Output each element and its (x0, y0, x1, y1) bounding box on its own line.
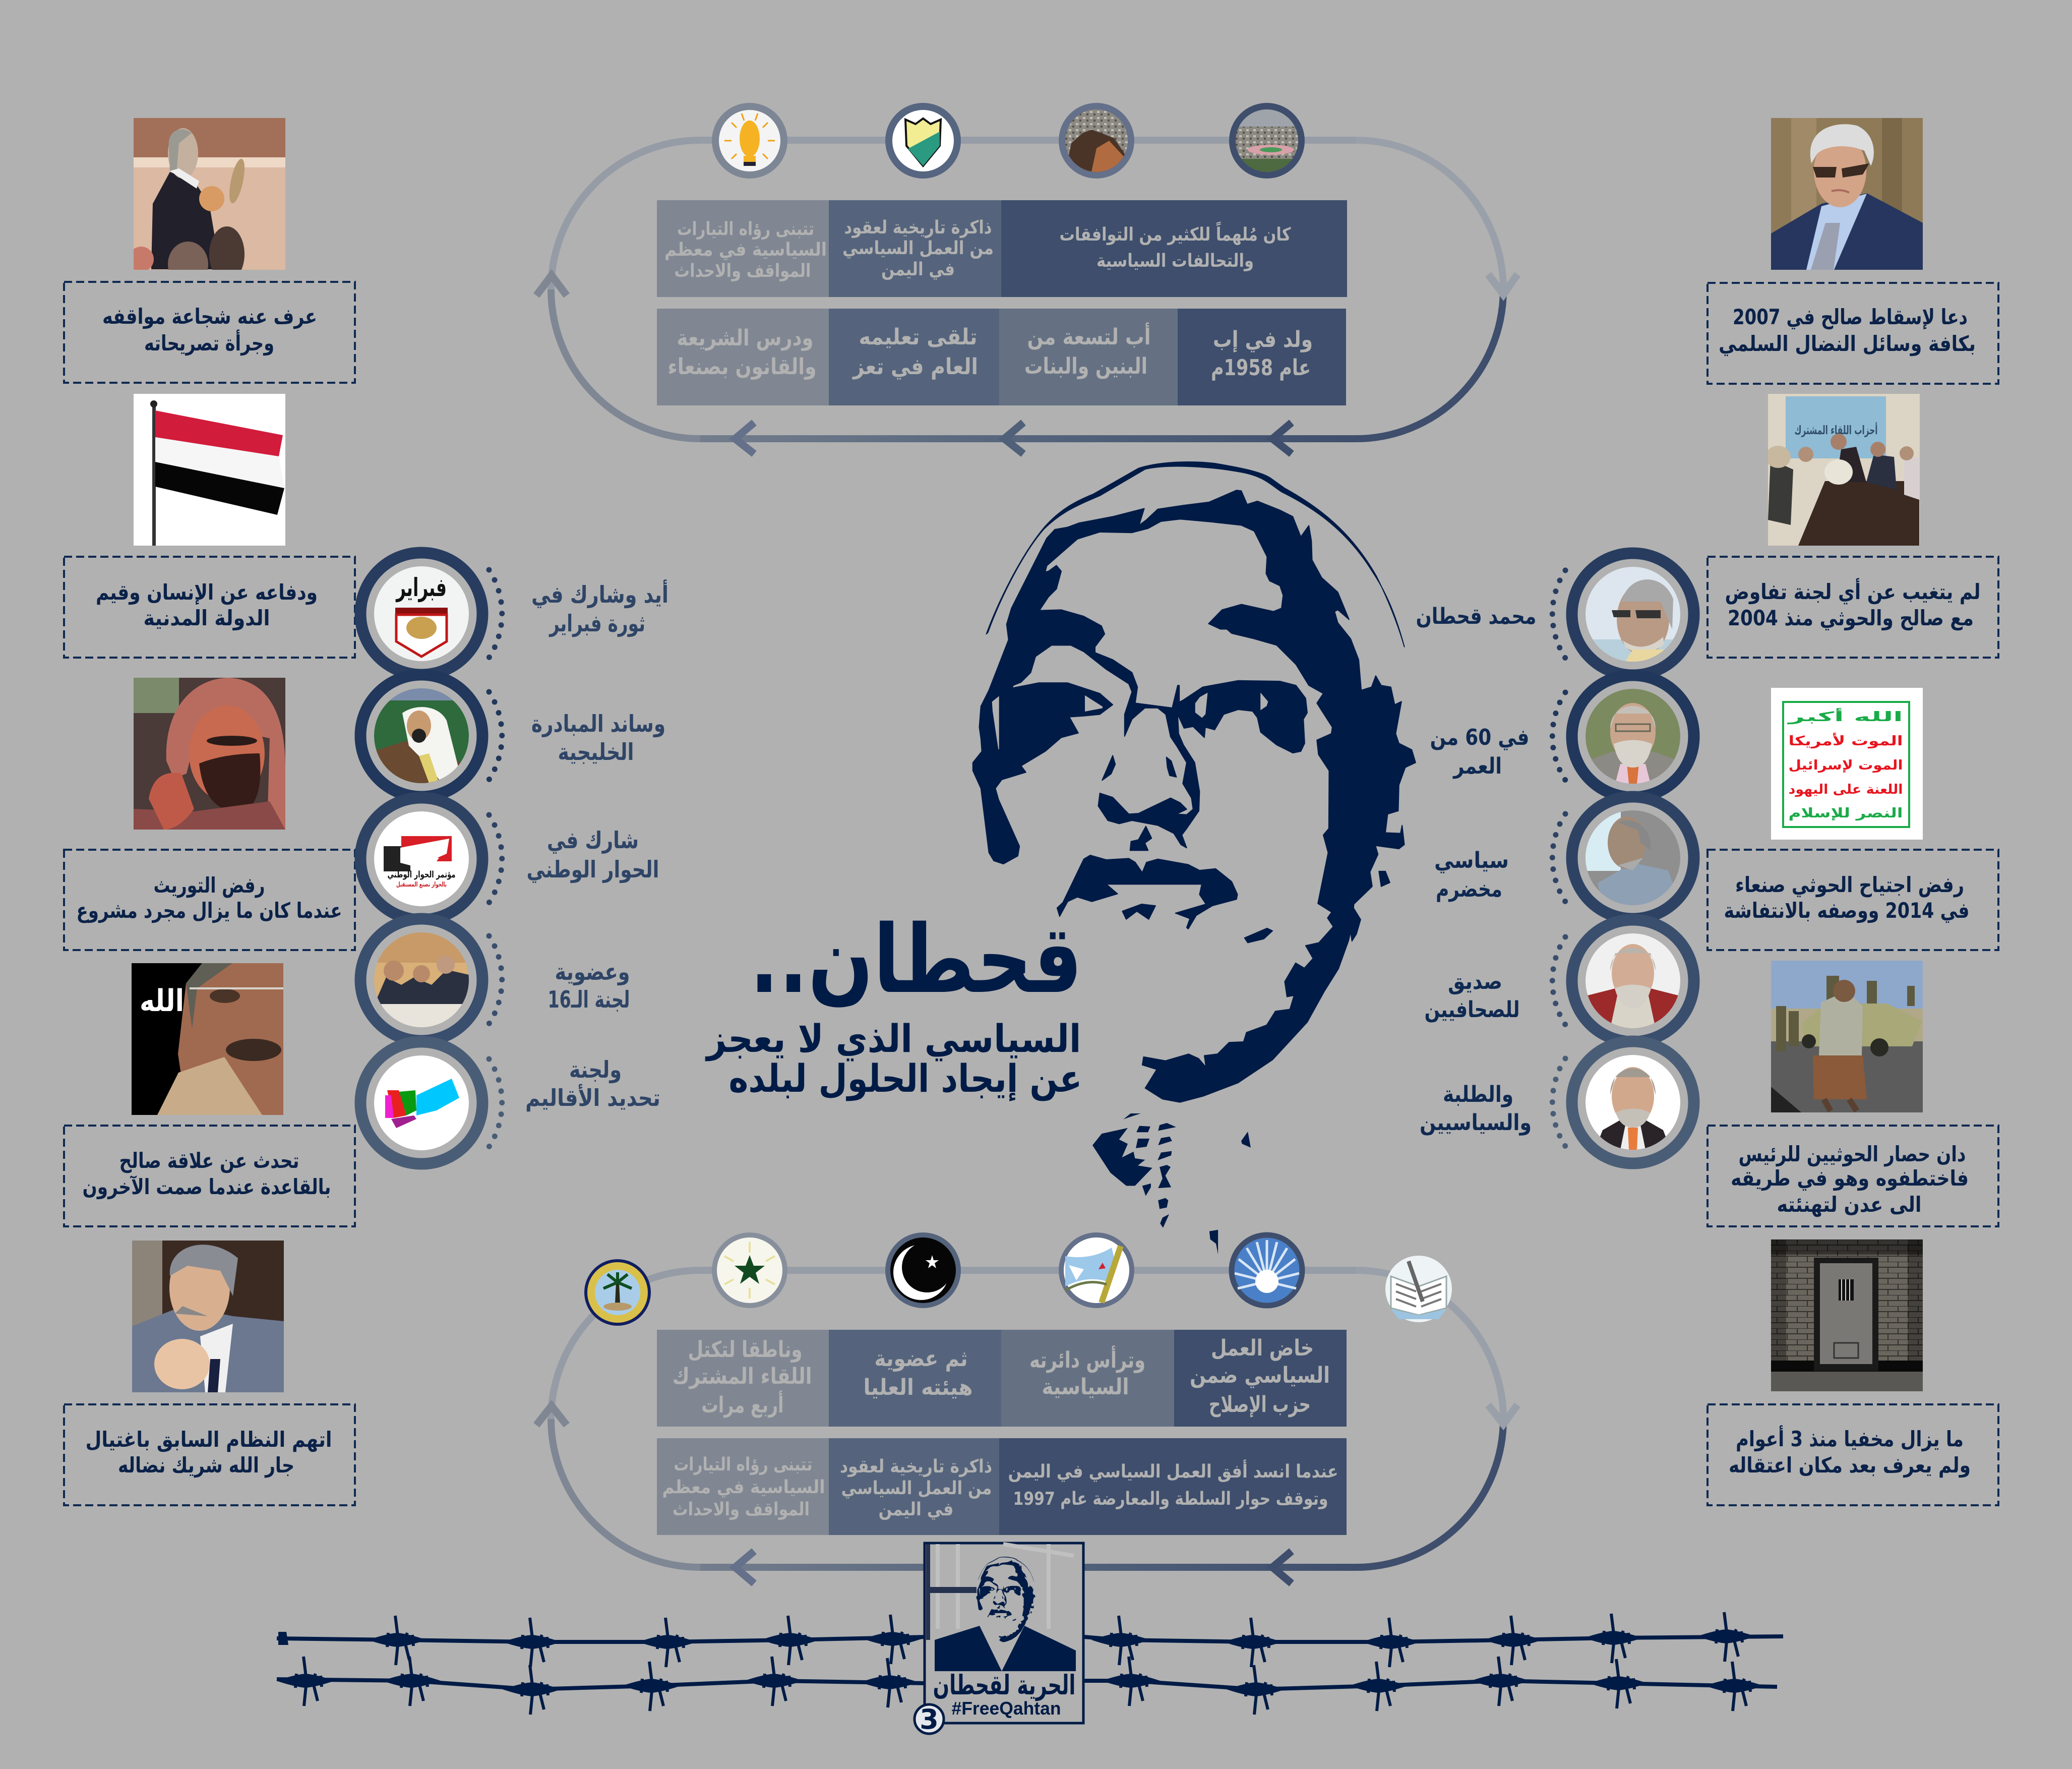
portrait: stencil face (973, 462, 1416, 1102)
right item 2: age (1430, 675, 1694, 797)
right column: photo, prison door (1771, 1240, 1923, 1391)
left callout 4 (64, 1126, 355, 1226)
left item 3: national dialogue: بالحوار نصنع المستقبل (396, 881, 447, 889)
table row three: السياسية (1042, 1374, 1129, 1400)
table row one: تتبنى رؤاه التيارات (677, 219, 814, 240)
right column: photo, JMP meeting (1768, 394, 1920, 546)
poster hashtag: #FreeQahtan (952, 1698, 1061, 1719)
right item 5: students and politicians (1420, 1041, 1694, 1163)
left item 5: regions map: تحديد الأقاليم (525, 1084, 660, 1111)
table row four: عندما انسد أفق العمل السياسي في اليمن (1008, 1459, 1338, 1482)
poster: free Qahtan (915, 1543, 1083, 1735)
left callout 2 (64, 557, 355, 658)
table row two: البنين والبنات (1024, 353, 1147, 379)
icon: dove and wheat logo (1061, 1235, 1132, 1306)
left callout 5 (64, 1404, 355, 1505)
left callout 4: بالقاعدة عندما صمت الآخرون (83, 1174, 331, 1200)
left item 5: regions map (360, 1042, 660, 1164)
table row one: كان مُلهماً للكثير من التوافقات (1060, 221, 1291, 245)
table row one: والتحالفات السياسية (1096, 251, 1254, 271)
table row three: أربع مرات (702, 1390, 783, 1418)
right item 4: friend of journalists (1425, 920, 1694, 1042)
left item 3: national dialogue: الحوار الوطني (526, 856, 659, 883)
left column: photo, Saleh with flag (132, 963, 283, 1115)
left callout 3: رفض التوريث (153, 873, 265, 898)
right timeline chain (1416, 553, 1694, 1163)
table row two: والقانون بصنعاء (667, 354, 817, 380)
track: top racetrack (551, 140, 1503, 439)
left column: photo, man on phone (134, 678, 285, 830)
table row four: ذاكرة تاريخية لعقود (840, 1456, 992, 1477)
right column: Houthi slogan: الله أكبر (1786, 708, 1903, 725)
table row two: العام في تعز (852, 354, 978, 380)
badge: number 3 (915, 1703, 944, 1735)
left callout 1 (64, 282, 355, 383)
right item 4: friend of journalists: صديق (1448, 969, 1502, 994)
poster face (977, 1557, 1035, 1642)
right column: Houthi slogan: اللعنة على اليهود (1789, 782, 1903, 797)
table row three: خاض العمل (1211, 1335, 1314, 1361)
left callout 2: الدولة المدنية (143, 606, 270, 631)
subtitle (705, 1016, 1082, 1101)
table row four: في اليمن (878, 1499, 954, 1520)
icon: palm logo (584, 1259, 651, 1326)
left item 1: February revolution (360, 553, 668, 675)
table row one: السياسية في معظم (664, 240, 827, 260)
right callout 1 (1708, 283, 1998, 384)
table row three (657, 1330, 1347, 1427)
table row four: تتبنى رؤاه التيارات (674, 1454, 813, 1475)
track: bottom racetrack (551, 1270, 1503, 1567)
left callout 2: ودفاعه عن الإنسان وقيم (96, 580, 318, 605)
icon: university badge (889, 106, 957, 175)
left callout 3 (64, 850, 355, 950)
table row one: ذاكرة تاريخية لعقود (844, 217, 992, 238)
badge: number 3: 3 (920, 1703, 939, 1735)
left item 2: Gulf initiative (360, 675, 665, 797)
table row three: اللقاء المشترك (673, 1364, 812, 1389)
right item 4: friend of journalists: للصحافيين (1425, 997, 1519, 1023)
table row one: المواقف والاحداث (675, 261, 811, 281)
icon: mountain photo (1059, 103, 1134, 179)
table row four: السياسية في معظم (662, 1477, 825, 1498)
icon: sunburst logo (1232, 1235, 1302, 1306)
left callout 5: اتهم النظام السابق باغتيال (86, 1427, 332, 1452)
right item 5: students and politicians: والسياسيين (1420, 1110, 1532, 1136)
left callout 1: عرف عنه شجاعة مواقفه (102, 304, 317, 329)
right callout 3: رفض اجتياح الحوثي صنعاء (1735, 872, 1964, 898)
left item 1: February revolution: ثورة فبراير (549, 610, 645, 637)
right item 1: name (1416, 553, 1694, 675)
title: main name: قحطان.. (750, 905, 1082, 1014)
table row three: حزب الإصلاح (1209, 1392, 1311, 1418)
left callout 3: عندما كان ما يزال مجرد مشروع (77, 898, 342, 923)
table row one: في اليمن (881, 259, 955, 280)
right callout 5: ولم يعرف بعد مكان اعتقاله (1729, 1453, 1971, 1478)
right column: Houthi slogan: الموت لأمريكا (1789, 733, 1903, 749)
right callout 2: لم يتغيب عن أي لجنة تفاوض (1725, 578, 1980, 605)
right callout 4 (1708, 1126, 1998, 1226)
right callout 2: مع صالح والحوثي منذ 2004 (1728, 606, 1974, 631)
poster Arabic caption: الحرية لقحطان (933, 1669, 1076, 1701)
left column: photo, man applauding (134, 118, 285, 270)
table row one: من العمل السياسي (842, 238, 994, 259)
poster jacket (935, 1626, 1076, 1671)
panel: early life timeline (536, 103, 1517, 454)
right callout 5: ما يزال مخفيا منذ 3 أعوام (1736, 1425, 1964, 1452)
left item 4: committee of 16: وعضوية (555, 958, 630, 985)
icon: book and pen logo (1385, 1256, 1452, 1322)
table row two: ودرس الشريعة (677, 325, 814, 351)
table row four: وتوقف حوار السلطة والمعارضة عام 1997 (1013, 1489, 1328, 1509)
right column: Houthi slogan: الموت لإسرائيل (1789, 758, 1903, 773)
panel: political career timeline (536, 1235, 1517, 1583)
right callout 4: الى عدن لتهنئته (1777, 1192, 1922, 1217)
subtitle: عن إيجاد الحلول لبلده (729, 1056, 1082, 1101)
right column: photo, elder in suit (1771, 118, 1923, 270)
left column: photo, Saleh with flag: الله (140, 983, 184, 1019)
table row three: وناطقا لتكتل (688, 1337, 803, 1363)
left item 3: national dialogue: شارك في (547, 827, 639, 854)
table row two: ولد في إب (1213, 327, 1313, 352)
right callout 4: دان حصار الحوثيين للرئيس (1738, 1142, 1966, 1167)
right callout 3: في 2014 ووصفه بالانتفاشة (1724, 898, 1969, 923)
table row four (657, 1438, 1347, 1535)
left item 5: regions map: ولجنة (569, 1056, 622, 1083)
table row three: وترأس دائرته (1029, 1345, 1145, 1373)
arrows: bottom track (536, 1405, 1517, 1583)
left item 2: Gulf initiative: وساند المبادرة (531, 710, 665, 737)
arrows: top track (536, 274, 1517, 454)
right item 2: age: العمر (1452, 753, 1502, 779)
icon: light bulb (715, 106, 784, 175)
title (705, 905, 1082, 1101)
table row one (657, 200, 1347, 297)
left callout 5: جار الله شريك نضاله (118, 1453, 294, 1478)
right item 3: politician (1434, 797, 1694, 919)
right item 3: politician: سياسي (1434, 848, 1509, 873)
right callout 5 (1708, 1404, 1998, 1505)
portrait: goatee fragments (1092, 1113, 1251, 1255)
right item 3: politician: مخضرم (1436, 876, 1502, 902)
table row two: عام 1958م (1211, 355, 1311, 381)
right item 1: name: محمد قحطان (1416, 604, 1537, 629)
icon: crescent logo (888, 1235, 958, 1306)
left column: photo, Yemen flag (134, 394, 285, 546)
left item 3: national dialogue: مؤتمر الحوار الوطني (387, 869, 456, 880)
left item 1: February revolution: أيد وشارك في (531, 579, 668, 608)
left item 1: February revolution: فبراير (395, 573, 447, 603)
left callout 1: وجرأة تصريحاته (144, 329, 274, 356)
barbed wire (276, 1612, 1783, 1715)
icon: green star logo (714, 1235, 785, 1306)
right callout 3 (1708, 850, 1998, 950)
icon: city photo (1229, 103, 1305, 179)
left item 2: Gulf initiative: الخليجية (558, 738, 634, 765)
table row two (657, 309, 1346, 405)
right callout 1: دعا لإسقاط صالح في 2007 (1733, 305, 1968, 330)
left timeline chain (360, 553, 668, 1164)
table row three: هيئته العليا (863, 1375, 973, 1400)
right column: Houthi slogan: النصر للإسلام (1789, 806, 1903, 821)
right item 2: age: في 60 من (1430, 725, 1530, 750)
right callout 2 (1708, 557, 1998, 658)
right callout 4: فاختطفوه وهو في طريقه (1731, 1166, 1969, 1191)
right column: Houthi slogan (1771, 688, 1923, 840)
right item 5: students and politicians: والطلبة (1443, 1082, 1513, 1107)
table row four: من العمل السياسي (841, 1478, 992, 1499)
table row two: أب لتسعة من (1027, 322, 1150, 350)
left item 3: national dialogue (360, 798, 659, 920)
right callout 1: بكافة وسائل النضال السلمي (1719, 331, 1976, 357)
subtitle: السياسي الذي لا يعجز (705, 1016, 1081, 1062)
table row four: المواقف والاحداث (673, 1499, 810, 1520)
right column: photo, fighter and tank (1771, 961, 1923, 1112)
table row three: ثم عضوية (874, 1346, 968, 1372)
left callout 4: تحدث عن علاقة صالح (119, 1148, 299, 1173)
table row two: تلقى تعليمه (859, 324, 977, 350)
table row three: السياسي ضمن (1190, 1363, 1330, 1388)
left column: photo, Jarallah Omar (132, 1241, 284, 1392)
left item 4: committee of 16: لجنة الـ16 (547, 986, 630, 1013)
left item 4: committee of 16 (360, 919, 630, 1041)
